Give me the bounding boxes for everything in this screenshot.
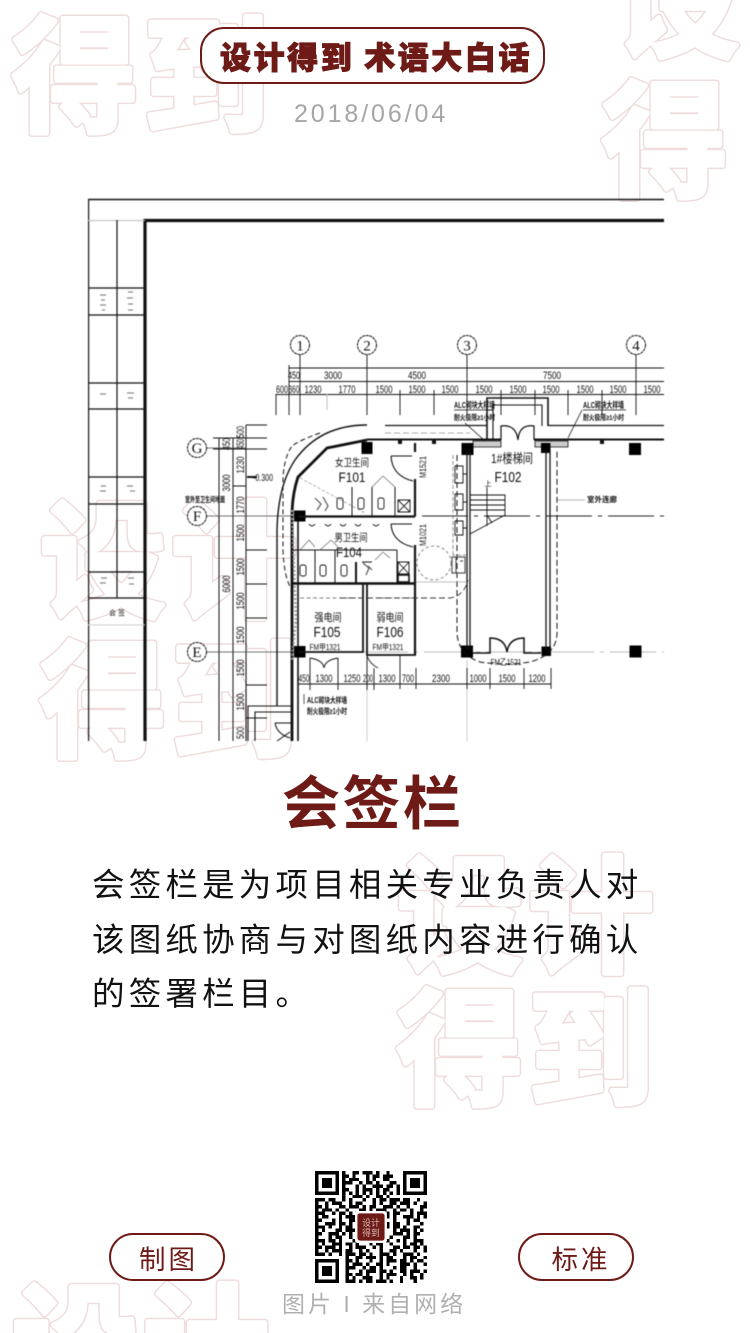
left dimension lines: -0.300: [253, 473, 273, 484]
top dimension lines: 1500: [576, 384, 594, 396]
QR finder top-right: [405, 1173, 425, 1193]
top dimension lines: 1500: [610, 384, 626, 396]
QR code: [315, 1171, 427, 1283]
top dimension lines: [276, 355, 664, 415]
bottom dimensions: 1300: [316, 673, 332, 685]
left dimension lines: 450: [221, 438, 233, 450]
southwest entrance: [248, 706, 292, 741]
blueprint drawing: [87, 198, 665, 742]
bottom dimensions: ALC砌块大样墙: [307, 695, 347, 705]
north walls and entrance: ALC砌块大样墙: [454, 400, 495, 410]
top dimension lines: 7500: [543, 370, 561, 382]
background watermark: 得到: [397, 950, 659, 1132]
body text: 该图纸协商与对图纸内容进行确认: [92, 922, 643, 958]
footer credit: 图片 I 来自网络: [282, 1291, 466, 1317]
toilets F101 F104: 男卫生间: [334, 531, 368, 544]
left dimension lines: 1500: [235, 558, 247, 576]
curved exterior wall: [277, 425, 367, 741]
footer pill: 制图: [109, 1233, 225, 1281]
service rooms F105 F106: FM甲1321: [372, 643, 404, 652]
top dimension lines: 1500: [476, 384, 492, 396]
toilets F101 F104: F101: [338, 469, 366, 485]
axis bubbles: G: [192, 441, 203, 457]
countersign column table: [88, 220, 145, 625]
top dimension lines: 1770: [338, 384, 356, 396]
service rooms F105 F106: 弱电间: [376, 611, 404, 624]
bottom dimensions: 200: [363, 673, 373, 685]
left dimension lines: 6000: [221, 576, 233, 592]
top dimension lines: 450: [288, 370, 300, 382]
axis bubbles: 1: [296, 338, 304, 354]
top dimension lines: 1500: [408, 384, 426, 396]
bottom dimensions: 700: [402, 673, 414, 685]
left dimension lines: 450: [235, 439, 247, 449]
footer pill: 标准: 标准: [552, 1238, 610, 1277]
toilets F101 F104: [292, 443, 428, 655]
service rooms F105 F106: [298, 584, 416, 672]
QR finder top-left: [317, 1173, 337, 1193]
top dimension lines: 4500: [408, 370, 426, 382]
QR finder bottom-left: [317, 1261, 337, 1281]
top dimension lines: 1500: [510, 384, 526, 396]
background watermark: 设计: [40, 462, 302, 644]
stair hall F102: F102: [494, 469, 522, 486]
top dimension lines: 3000: [324, 370, 342, 382]
heading: 会签栏: [282, 757, 464, 841]
background watermark: 得到: [40, 602, 302, 784]
left dimension lines: 500: [235, 727, 247, 739]
left dimension lines: 1770: [235, 496, 247, 514]
QR logo: 设计: [362, 1216, 380, 1229]
axis bubbles: E: [192, 645, 202, 661]
bottom dimensions: [298, 668, 551, 716]
left dimension lines: 室外至卫生间地面: [185, 494, 225, 504]
stair hall F102: 1#楼梯间: [491, 451, 533, 466]
bottom dimensions: 1000: [470, 673, 486, 685]
left dimension lines: 1500: [235, 660, 247, 676]
left dimension lines: 3000: [221, 474, 233, 492]
bottom dimensions: 1250: [344, 673, 360, 685]
background watermark: 得到: [397, 950, 659, 1132]
body text: 会签栏是为项目相关专业负责人对: [92, 867, 643, 903]
axis bubbles: [188, 336, 646, 662]
left dimension lines: 1500: [235, 694, 247, 710]
service rooms F105 F106: 强电间: [314, 611, 342, 624]
stair hall F102: FM乙1521: [490, 657, 522, 667]
north walls and entrance: ALC砌块大样墙: [583, 400, 624, 410]
bottom dimensions: 450: [298, 673, 310, 685]
toilets F101 F104: 女卫生间: [335, 456, 369, 469]
bottom dimensions: 耐火极限≥1小时: [307, 706, 347, 716]
axis bubbles: 3: [463, 338, 471, 354]
bottom dimensions: 1200: [528, 673, 546, 685]
top dimension lines: 1500: [442, 384, 458, 396]
QR logo: [355, 1211, 387, 1243]
left dimension lines: [185, 425, 273, 741]
top dimension lines: 1500: [542, 384, 560, 396]
body text: [92, 867, 643, 1012]
service rooms F105 F106: F106: [376, 624, 404, 641]
north walls and entrance: 耐火极限≥1小时: [583, 412, 624, 422]
left dimension lines: 1500: [235, 592, 247, 610]
bottom dimensions: 1300: [378, 673, 396, 685]
axis bubbles: 2: [363, 338, 371, 354]
background watermark: 得: [602, 42, 728, 224]
left dimension lines: 500: [235, 426, 247, 438]
background watermark: 设计: [397, 817, 659, 999]
header pill title: 设计得到 术语大白话: [220, 33, 532, 78]
axis bubbles: 4: [632, 338, 640, 354]
date: 2018/06/04: [294, 100, 448, 128]
left dimension lines: 1230: [235, 456, 247, 474]
stair hall F102: [340, 450, 557, 667]
toilets F101 F104: F104: [336, 544, 362, 560]
stair hall F102: 上: [484, 479, 492, 488]
background watermark: 得: [602, 42, 728, 224]
background watermark: 得到: [40, 602, 302, 784]
north walls and entrance: 室外连廊: [587, 494, 617, 504]
bottom dimensions: 2300: [432, 673, 450, 685]
background watermark: 设计: [40, 462, 302, 644]
axis lines: [207, 448, 664, 741]
footer pill: 制图: 制图: [139, 1238, 198, 1277]
toilets F101 F104: M1521: [418, 456, 428, 478]
service rooms F105 F106: FM甲1321: [310, 643, 341, 652]
QR logo: 得到: [362, 1226, 380, 1239]
background watermark: 设计: [397, 817, 659, 999]
top dimension lines: 1230: [304, 384, 322, 396]
left dimension lines: 1500: [235, 626, 247, 644]
structural columns: [294, 442, 642, 658]
top dimension lines: 600: [276, 384, 288, 396]
countersign column table: 会 签: [109, 608, 125, 617]
top dimension lines: 360: [288, 384, 300, 396]
north walls and entrance: 耐火极限≥1小时: [454, 412, 495, 422]
axis bubbles: F: [193, 509, 201, 525]
top dimension lines: 1500: [376, 384, 392, 396]
footer pill: 标准: [518, 1233, 634, 1281]
bottom dimensions: 1500: [498, 673, 516, 685]
toilets F101 F104: M1021: [418, 524, 428, 546]
drawing frame: [88, 199, 664, 741]
left dimension lines: 1500: [235, 524, 247, 542]
service rooms F105 F106: F105: [314, 624, 340, 641]
north walls and entrance: [367, 398, 664, 504]
body text: 的签署栏目。: [92, 976, 312, 1012]
